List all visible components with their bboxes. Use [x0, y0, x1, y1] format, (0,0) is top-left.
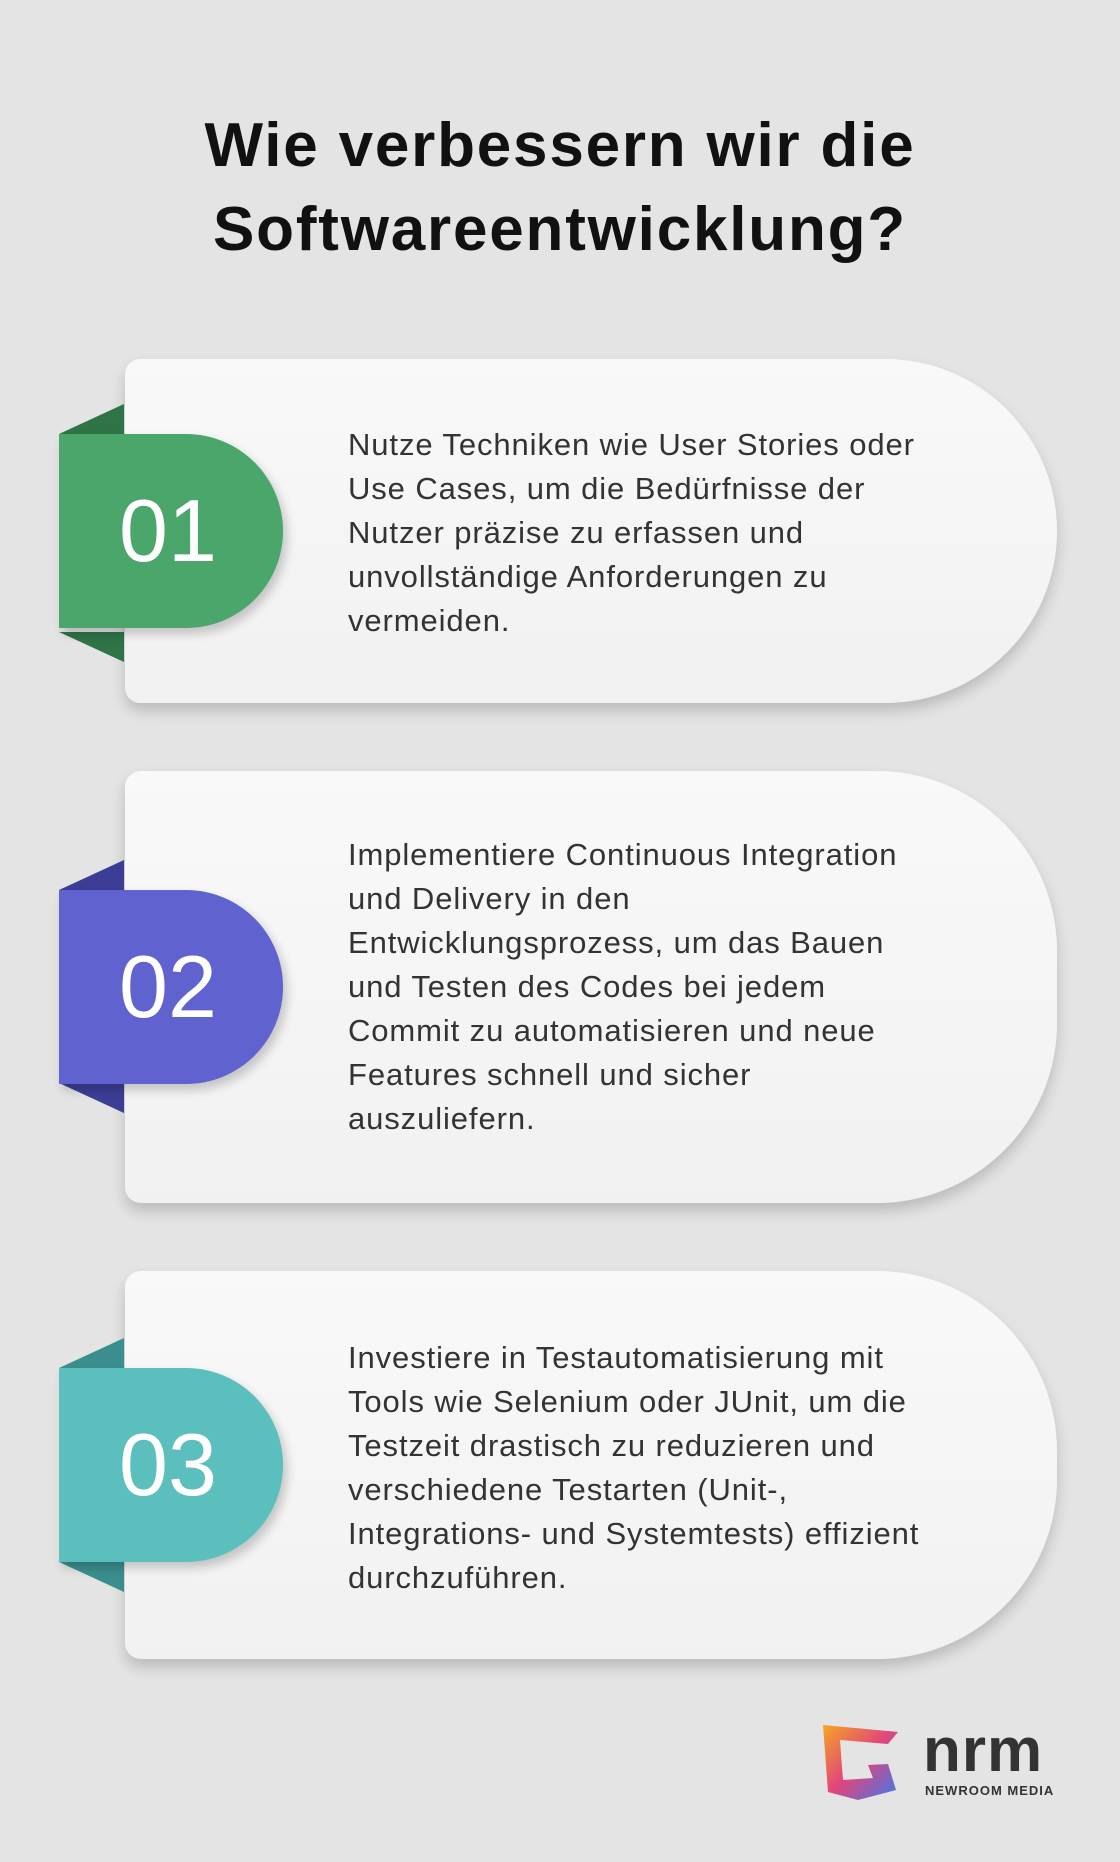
text 2	[348, 837, 897, 1136]
text 3: Integrations- und Systemtests) effizient	[348, 1516, 919, 1551]
text 3: Investiere in Testautomatisierung mit	[348, 1340, 884, 1375]
logo text: nrm	[923, 1716, 1043, 1785]
text 2: und Delivery in den	[348, 881, 630, 916]
text 2: und Testen des Codes bei jedem	[348, 969, 826, 1004]
card 1	[125, 359, 1057, 703]
badge 03	[59, 1368, 283, 1562]
text 2: auszuliefern.	[348, 1101, 535, 1136]
fold 3	[59, 1338, 124, 1592]
text 2: Commit zu automatisieren und neue	[348, 1013, 876, 1048]
fold 1	[59, 404, 124, 662]
text 1	[348, 427, 915, 638]
text 3: durchzuführen.	[348, 1560, 567, 1595]
card 2	[125, 771, 1057, 1203]
text 2: Implementiere Continuous Integration	[348, 837, 897, 872]
badge 02	[59, 890, 283, 1084]
panel: step 1	[58, 359, 1062, 717]
icon: logo mark	[823, 1725, 898, 1800]
text 2: Features schnell und sicher	[348, 1057, 751, 1092]
badge 03: 03	[119, 1415, 217, 1514]
title	[204, 111, 916, 264]
text 1: Use Cases, um die Bedürfnisse der	[348, 471, 865, 506]
fold 2	[59, 860, 124, 1113]
text 1: vermeiden.	[348, 603, 510, 638]
text 3	[348, 1340, 919, 1595]
text 3: Testzeit drastisch zu reduzieren und	[348, 1428, 875, 1463]
text 2: Entwicklungsprozess, um das Bauen	[348, 925, 884, 960]
logo	[823, 1716, 1054, 1800]
badge 02: 02	[119, 937, 217, 1036]
logo: NEWROOM MEDIA	[925, 1783, 1054, 1798]
panel: step 3	[58, 1271, 1063, 1673]
panel: step 2	[58, 771, 1063, 1217]
text 1: Nutze Techniken wie User Stories oder	[348, 427, 915, 462]
text 1: unvollständige Anforderungen zu	[348, 559, 827, 594]
title: Wie verbessern wir die	[204, 111, 916, 180]
text 3: Tools wie Selenium oder JUnit, um die	[348, 1384, 907, 1419]
text 1: Nutzer präzise zu erfassen und	[348, 515, 804, 550]
badge 01: 01	[119, 481, 217, 580]
card 3	[125, 1271, 1057, 1659]
badge 01	[59, 434, 283, 628]
text 3: verschiedene Testarten (Unit-,	[348, 1472, 788, 1507]
title: Softwareentwicklung?	[213, 195, 907, 264]
